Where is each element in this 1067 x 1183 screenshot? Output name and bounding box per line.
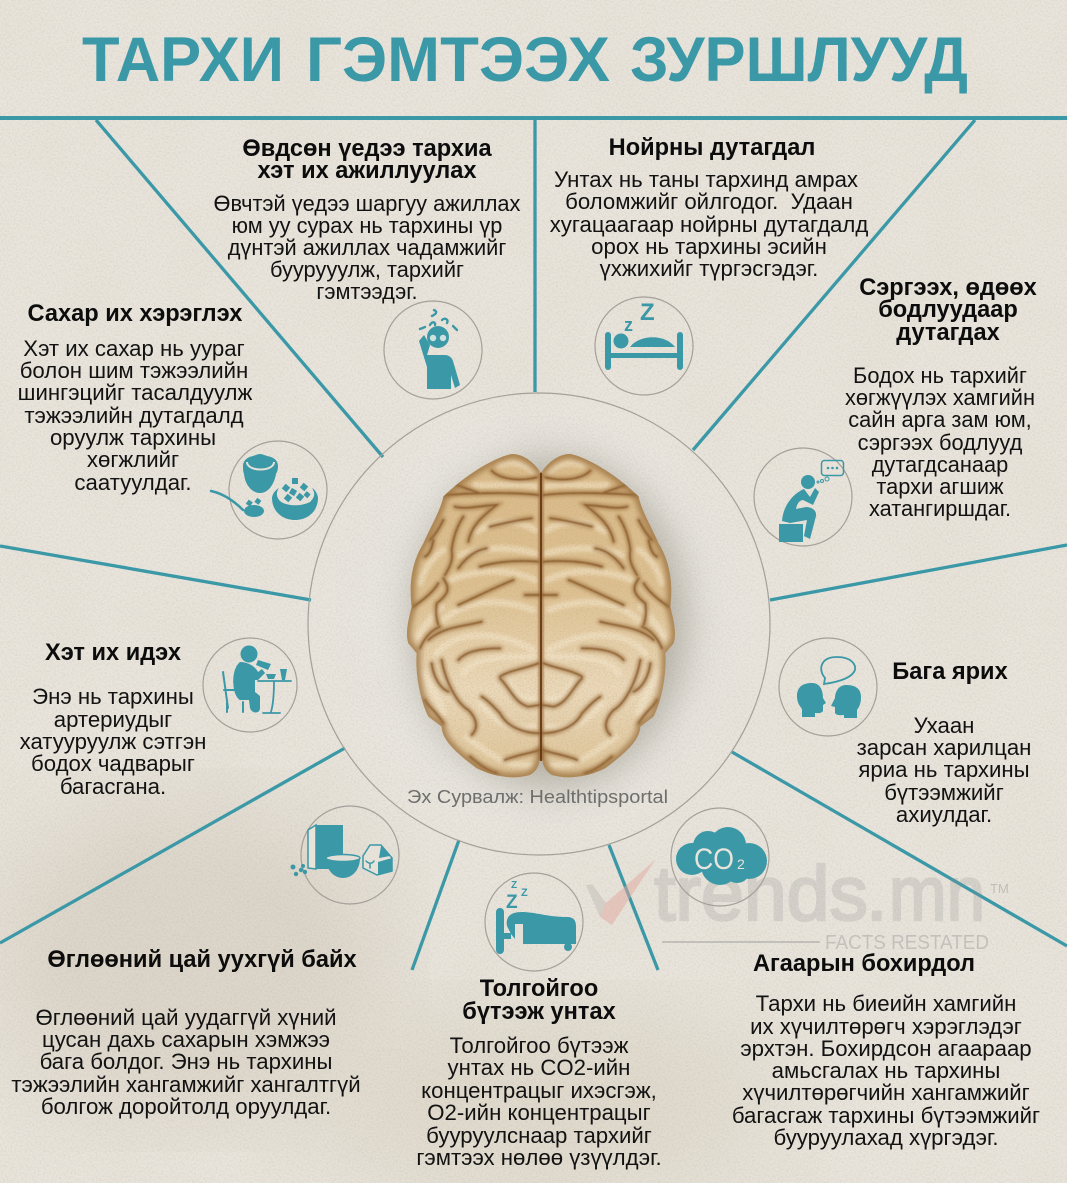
watermark: trends.mn: TM: [990, 881, 1009, 896]
text: head covered: O2-ийн концентрацыг: [427, 1100, 651, 1125]
heading: stimulating thoughts: бодлуудаар: [878, 297, 1018, 323]
text: overeating: артериудыг: [54, 707, 172, 732]
text: overeating: Энэ нь тархины: [32, 684, 194, 709]
heading: head covered: [462, 976, 616, 1025]
text: head covered: Толгойгоо бүтээж: [450, 1033, 629, 1058]
heading: head covered: бүтээж унтах: [462, 999, 616, 1025]
heading: low talk: Бага ярих: [892, 659, 1008, 685]
text: working while ill: гэмтээдэг.: [316, 279, 418, 304]
heading: working while ill: [242, 136, 492, 184]
heading: working while ill: хэт их ажиллуулах: [257, 158, 477, 184]
text: head covered: концентрацыг ихэсгэж,: [421, 1078, 657, 1103]
text: stimulating thoughts: дутагдсанаар: [872, 452, 1008, 477]
text: stimulating thoughts: [845, 363, 1035, 521]
text: too much sugar: хөгжлийг: [87, 447, 179, 472]
left hemisphere: [400, 447, 543, 783]
text: too much sugar: болон шим тэжээлийн: [20, 358, 248, 383]
panel: skipping breakfast: [11, 806, 399, 1119]
text: air pollution: бууруулахад хүргэдэг.: [773, 1125, 999, 1150]
text: stimulating thoughts: тархи агшиж: [876, 474, 1004, 499]
watermark: trends.mn: mn: [889, 851, 985, 937]
text: stimulating thoughts: хөгжүүлэх хамгийн: [845, 385, 1035, 410]
text: too much sugar: шингэцийг тасалдуулж: [18, 380, 252, 405]
text: low talk: зарсан харилцан: [857, 735, 1031, 760]
text: air pollution: хүчилтөрөгчийн хангамжийг: [742, 1080, 1030, 1105]
text: skipping breakfast: тэжээлийн хангамжийг хангалтгүй: [11, 1072, 361, 1097]
panel: sleeping with head covered: [416, 873, 662, 1170]
panel: overeating: [20, 638, 297, 799]
text: too much sugar: оруулж тархины: [50, 425, 216, 450]
text: low talk: яриа нь тархины: [858, 757, 1030, 782]
icon: sleeper under blanket: Z: [521, 887, 528, 899]
icon: person eating at table: [203, 638, 297, 732]
text: skipping breakfast: цусан дахь сахарын хэмжээ: [42, 1027, 330, 1052]
icon: bed with sleeper: z: [624, 315, 633, 335]
icon: cereal, bowl and milk: [290, 806, 399, 904]
text: overeating: хатууруулж сэтгэн: [20, 729, 206, 754]
text: too much sugar: тэжээлийн дутагдалд: [24, 403, 244, 428]
panel: working while ill: [214, 136, 521, 399]
text: air pollution: их хүчилтөрөгч хэрэглэдэг: [750, 1014, 1022, 1039]
icon: CO2 cloud: CO: [694, 843, 734, 876]
heading: head covered: Толгойгоо: [480, 976, 598, 1002]
icon: dizzy person: [384, 301, 482, 399]
icon: sleeper under blanket: [485, 873, 583, 971]
title: ГЭМТЭЭХ: [306, 25, 610, 95]
text: overeating: багасгана.: [60, 774, 166, 799]
panel: lack of stimulating thoughts: [754, 275, 1037, 546]
heading: stimulating thoughts: Сэргээх, өдөөх: [859, 275, 1037, 301]
text: working while ill: [214, 191, 521, 304]
title: [82, 25, 968, 95]
text: skipping breakfast: [11, 1005, 361, 1119]
heading: skipping breakfast: Өглөөний цай уухгүй байх: [47, 947, 357, 973]
text: head covered: унтах нь CO2-ийн: [448, 1055, 630, 1080]
panel: air pollution: [671, 808, 1040, 1150]
text: air pollution: амьсгалах нь тархины: [772, 1058, 1000, 1083]
text: overeating: [20, 684, 206, 799]
text: working while ill: буурууулж, тархийг: [270, 257, 464, 282]
text: too much sugar: саатуулдаг.: [74, 470, 192, 495]
text: low talk: ахиулдаг.: [896, 802, 992, 827]
watermark: trends.mn: .: [866, 851, 887, 937]
text: lack of sleep: Унтах нь таны тархинд амрах: [554, 167, 858, 192]
icon: thinking person: [754, 448, 852, 546]
heading: lack of sleep: Нойрны дутагдал: [609, 135, 815, 161]
text: air pollution: Тархи нь биеийн хамгийн: [756, 991, 1016, 1016]
text: working while ill: Өвчтэй үедээ шаргуу ажиллах: [214, 191, 521, 216]
title: ЗУРШЛУУД: [630, 25, 968, 95]
text: stimulating thoughts: хатангиршдаг.: [869, 496, 1011, 521]
text: head covered: бууруулснаар тархийг: [426, 1123, 652, 1148]
text: skipping breakfast: Өглөөний цай уудаггүй хүний: [35, 1005, 337, 1030]
text: head covered: [416, 1033, 662, 1170]
text: head covered: гэмтээх нөлөө үзүүлдэг.: [416, 1145, 662, 1170]
text: low talk: [857, 713, 1031, 827]
title: ТАРХИ: [82, 25, 284, 95]
text: lack of sleep: [550, 167, 868, 281]
text: low talk: бүтээмжийг: [884, 780, 1004, 805]
text: overeating: бодох чадварыг: [31, 751, 195, 776]
heading: stimulating thoughts: [859, 275, 1037, 346]
radial divider frame: [0, 118, 1067, 970]
text: too much sugar: Хэт их сахар нь уураг: [23, 336, 245, 361]
panel: lack of sleep: [550, 135, 868, 395]
text: lack of sleep: боломжийг ойлгодог. Удаан: [565, 189, 853, 214]
heading: overeating: Хэт их идэх: [45, 640, 181, 666]
panel: too much sugar: [18, 301, 327, 539]
text: lack of sleep: хугацаагаар нойрны дутагдалд: [550, 212, 868, 237]
icon: sugar bowls and spoon: [211, 441, 327, 539]
text: stimulating thoughts: сайн арга зам юм,: [848, 407, 1032, 432]
icon: bed with sleeper: Z: [640, 299, 655, 326]
text: air pollution: эрхтэн. Бохирдсон агаараар: [740, 1036, 1032, 1061]
text: working while ill: юм уу сурах нь тархины үр: [232, 213, 502, 238]
icon: bed with sleeper: [595, 297, 693, 395]
text: skipping breakfast: болгож доройтолд оруулдаг.: [41, 1094, 331, 1119]
watermark: trends.mn: [586, 851, 1009, 954]
icon: CO2 cloud: [671, 808, 769, 906]
icon: sleeper under blanket: Z: [511, 880, 517, 891]
source credit: Эх Сурвалж: Healthtipsportal: [407, 786, 668, 807]
text: air pollution: багасгаж тархины бүтээмжийг: [732, 1103, 1040, 1128]
heading: stimulating thoughts: дутагдах: [896, 320, 1000, 346]
brain illustration: [400, 447, 686, 786]
icon: CO2 cloud: 2: [737, 856, 745, 872]
text: low talk: Ухаан: [914, 713, 974, 738]
heading: too much sugar: Сахар их хэрэглэх: [28, 301, 242, 327]
watermark: trends.mn: trends: [654, 851, 868, 937]
panel: low talk: [779, 638, 1031, 827]
icon: sleeper under blanket: Z: [506, 892, 518, 913]
text: stimulating thoughts: сэргээх бодлууд: [858, 430, 1023, 455]
icon: two talking heads: [779, 638, 877, 736]
central circle: [308, 393, 770, 855]
watermark: trends.mn: FACTS RESTATED: [825, 932, 989, 954]
text: skipping breakfast: бага болдог. Энэ нь тархины: [40, 1049, 332, 1074]
heading: air pollution: Агаарын бохирдол: [753, 951, 975, 977]
text: lack of sleep: орох нь тархины эсийн: [591, 234, 827, 259]
text: air pollution: [732, 991, 1040, 1150]
text: lack of sleep: үхжихийг түргэсгэдэг.: [600, 256, 818, 281]
heading: working while ill: Өвдсөн үедээ тархиа: [242, 136, 492, 162]
text: working while ill: дүнтэй ажиллах чадамжийг: [228, 235, 506, 260]
text: too much sugar: [18, 336, 252, 495]
text: stimulating thoughts: Бодох нь тархийг: [853, 363, 1027, 388]
